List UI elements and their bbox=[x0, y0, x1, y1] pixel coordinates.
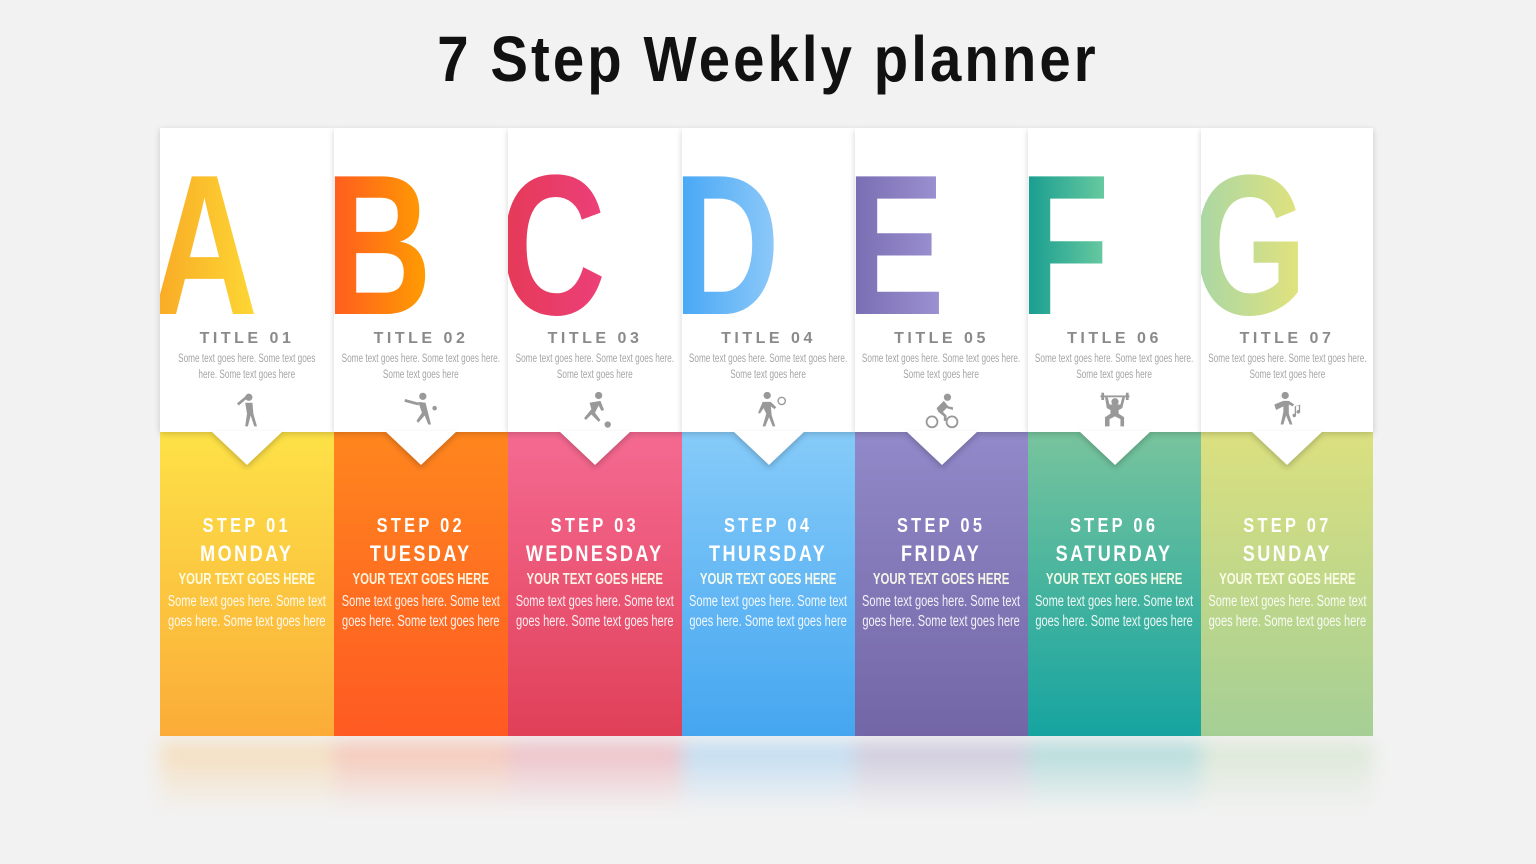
step 05: YOUR TEXT GOES HERE bbox=[873, 571, 1010, 588]
title 01: TITLE 01 bbox=[200, 330, 294, 347]
step 01: goes here. Some text goes here bbox=[168, 613, 326, 630]
step 07 bbox=[1201, 432, 1373, 736]
step 06: goes here. Some text goes here bbox=[1036, 613, 1193, 630]
step 06: Some text goes here. Some text bbox=[1035, 593, 1194, 610]
desc 05: Some text goes here bbox=[904, 369, 979, 381]
desc 02: Some text goes here. Some text goes here. bbox=[342, 353, 500, 365]
icon: cricket bbox=[404, 392, 437, 424]
desc 03: Some text goes here bbox=[557, 369, 633, 381]
icon: cycling bbox=[926, 394, 958, 428]
desc 02: Some text goes here bbox=[383, 369, 459, 381]
step 07: SUNDAY bbox=[1242, 541, 1332, 566]
step 05: FRIDAY bbox=[901, 541, 982, 566]
step 06: STEP 06 bbox=[1070, 515, 1159, 537]
step 05: Some text goes here. Some text bbox=[862, 593, 1021, 610]
column C bbox=[506, 128, 684, 736]
step 01: YOUR TEXT GOES HERE bbox=[179, 571, 315, 588]
desc 04: Some text goes here. Some text goes here. bbox=[689, 353, 848, 365]
column E bbox=[852, 128, 1029, 736]
step 04: THURSDAY bbox=[709, 541, 828, 566]
desc 02 bbox=[342, 353, 500, 381]
step 07: goes here. Some text goes here bbox=[1208, 613, 1366, 630]
step 02: STEP 02 bbox=[377, 515, 465, 537]
desc 04 bbox=[689, 353, 848, 381]
step 03 bbox=[508, 432, 682, 736]
icon: weightlifting bbox=[1100, 392, 1130, 426]
title: 7 Step Weekly planner bbox=[437, 23, 1099, 95]
icon: soccer bbox=[584, 392, 611, 428]
title 03: TITLE 03 bbox=[548, 330, 642, 347]
step 07: Some text goes here. Some text bbox=[1208, 593, 1366, 610]
step 05 bbox=[855, 432, 1028, 736]
step 01: Some text goes here. Some text bbox=[168, 593, 326, 610]
step 06: YOUR TEXT GOES HERE bbox=[1046, 571, 1183, 588]
step 07: YOUR TEXT GOES HERE bbox=[1219, 571, 1355, 588]
column B bbox=[332, 128, 510, 736]
desc 07 bbox=[1208, 353, 1366, 381]
step 04: goes here. Some text goes here bbox=[690, 613, 847, 630]
reflection bbox=[152, 736, 1376, 804]
step 03: STEP 03 bbox=[551, 515, 639, 537]
step 03: goes here. Some text goes here bbox=[516, 613, 674, 630]
icon: dancing bbox=[1274, 392, 1300, 424]
desc 01: Some text goes here. Some text goes bbox=[178, 353, 316, 365]
desc 05: Some text goes here. Some text goes here. bbox=[862, 353, 1021, 365]
icon: tennis bbox=[758, 392, 786, 426]
step 07: STEP 07 bbox=[1243, 515, 1331, 537]
title 07: TITLE 07 bbox=[1240, 330, 1334, 347]
step 04: Some text goes here. Some text bbox=[689, 593, 848, 610]
step 01: MONDAY bbox=[200, 541, 294, 566]
title 05: TITLE 05 bbox=[894, 330, 989, 347]
column D bbox=[680, 128, 856, 736]
step 03: YOUR TEXT GOES HERE bbox=[527, 571, 663, 588]
desc 04: Some text goes here bbox=[731, 369, 806, 381]
column A bbox=[158, 128, 336, 736]
column G bbox=[1198, 128, 1376, 736]
step 03: WEDNESDAY bbox=[526, 541, 664, 566]
step 05: STEP 05 bbox=[897, 515, 986, 537]
step 06 bbox=[1028, 432, 1201, 736]
step 02: goes here. Some text goes here bbox=[342, 613, 500, 630]
desc 03: Some text goes here. Some text goes here. bbox=[516, 353, 674, 365]
step 01 bbox=[160, 432, 334, 736]
title 06: TITLE 06 bbox=[1067, 330, 1162, 347]
icon: baseball bbox=[237, 394, 257, 426]
title 04: TITLE 04 bbox=[721, 330, 816, 347]
title 02: TITLE 02 bbox=[374, 330, 468, 347]
step 03: Some text goes here. Some text bbox=[516, 593, 674, 610]
desc 06 bbox=[1035, 353, 1194, 381]
desc 06: Some text goes here bbox=[1077, 369, 1152, 381]
desc 07: Some text goes here bbox=[1249, 369, 1325, 381]
desc 03 bbox=[516, 353, 674, 381]
step 06: SATURDAY bbox=[1056, 541, 1173, 566]
step 02: YOUR TEXT GOES HERE bbox=[353, 571, 489, 588]
desc 01 bbox=[178, 353, 316, 381]
step 05: goes here. Some text goes here bbox=[863, 613, 1020, 630]
desc 01: here. Some text goes here bbox=[199, 369, 295, 381]
step 02: TUESDAY bbox=[370, 541, 472, 566]
column F bbox=[1026, 128, 1202, 736]
step 04: YOUR TEXT GOES HERE bbox=[700, 571, 837, 588]
step 01: STEP 01 bbox=[203, 515, 291, 537]
step 02: Some text goes here. Some text bbox=[342, 593, 500, 610]
desc 05 bbox=[862, 353, 1021, 381]
step 04: STEP 04 bbox=[724, 515, 813, 537]
desc 07: Some text goes here. Some text goes here. bbox=[1208, 353, 1366, 365]
step 02 bbox=[334, 432, 508, 736]
desc 06: Some text goes here. Some text goes here. bbox=[1035, 353, 1194, 365]
step 04 bbox=[682, 432, 855, 736]
